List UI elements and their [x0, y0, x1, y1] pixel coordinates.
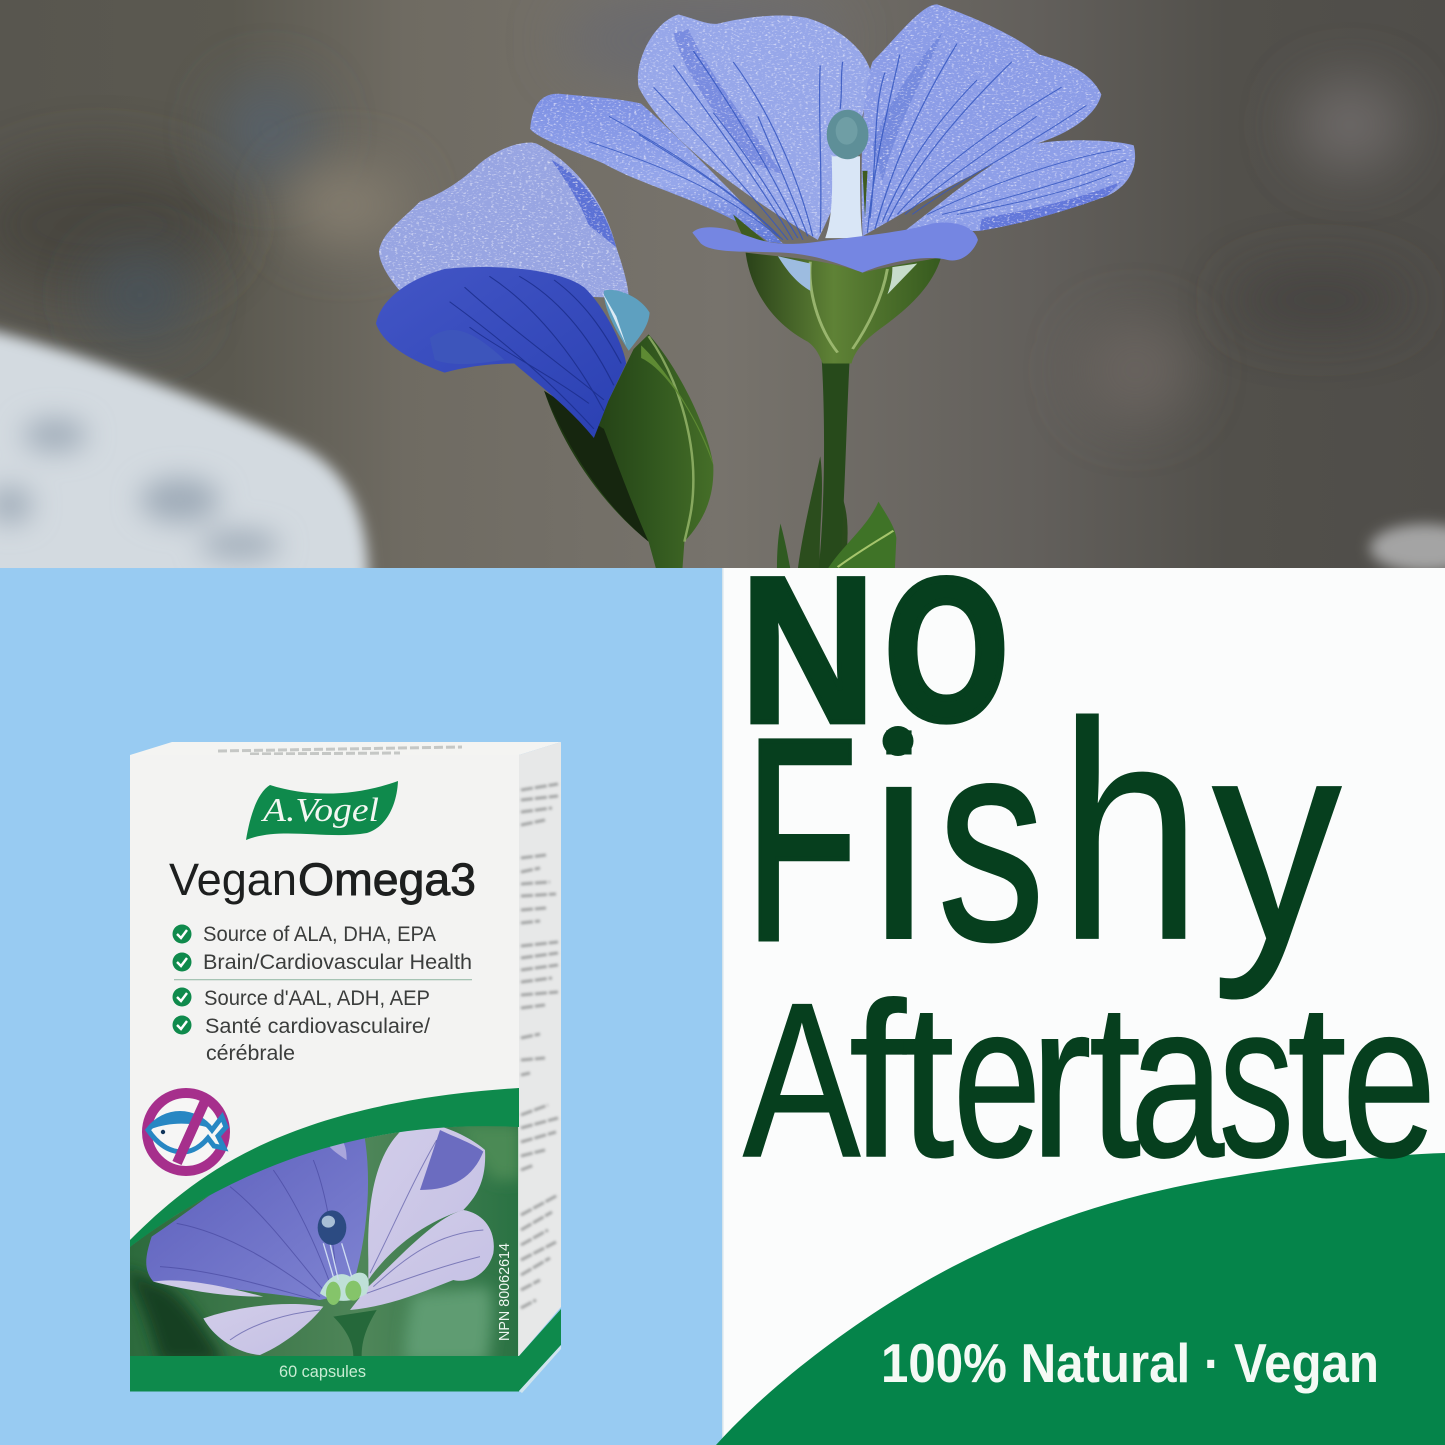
flower: open bloom and bud: [376, 4, 1135, 569]
logo: A.Vogel leaf: [246, 781, 398, 840]
bottom green band: [130, 1356, 519, 1392]
benefit list: Source of ALA, DHA, EPA: [203, 923, 436, 946]
bottom green band: 60 capsules: [279, 1363, 366, 1381]
icon: round dot on the i: [882, 726, 914, 756]
headline: Aftertaste: t: [900, 957, 954, 1203]
icon: no fish badge: [147, 1093, 226, 1171]
stamen: [825, 110, 868, 238]
headline: Aftertaste: f: [849, 957, 906, 1203]
product name: Omega3: [298, 854, 476, 905]
benefit list: Santé cardiovasculaire/: [205, 1015, 430, 1038]
check icon 3: [172, 988, 192, 1006]
benefit list: [172, 923, 472, 1065]
bud flower: [376, 143, 713, 569]
check icon 4: [172, 1016, 192, 1034]
headline: Aftertaste: e: [1342, 957, 1436, 1203]
headline: Aftertaste: e: [953, 957, 1041, 1203]
headline: NO: [740, 568, 1010, 730]
product name: [169, 854, 476, 905]
headline: Fishy: [745, 712, 1345, 1004]
headline: Fishy: h: [1058, 658, 1202, 1006]
headline: Aftertaste: [740, 985, 1435, 1160]
panel: blue background behind product: [0, 568, 722, 1445]
headline: Aftertaste: t: [1287, 957, 1347, 1203]
headline: Fishy: i: [867, 679, 931, 1001]
benefit list: Brain/Cardiovascular Health: [203, 951, 472, 974]
panel: white claim panel: [716, 568, 1445, 1445]
box right side panel: [519, 742, 561, 1393]
headline: NO: O: [885, 537, 1008, 762]
headline: Fishy: s: [938, 679, 1044, 1001]
green swoosh band: [130, 1088, 519, 1247]
check icon 1: [172, 924, 192, 944]
leaves and stem: [777, 360, 896, 569]
product box: VeganOmega3 carton: [120, 742, 561, 1393]
green corner swoosh: [716, 1153, 1445, 1445]
NPN number: NPN 80062614: [497, 1243, 513, 1341]
tagline: 100% Natural · Vegan: [881, 1332, 1379, 1394]
front petal lip: [692, 222, 978, 273]
benefit list: cérébrale: [206, 1042, 295, 1065]
panel: flax flower photograph: [0, 0, 1445, 600]
headline: Aftertaste: a: [1130, 957, 1224, 1203]
box top face: [130, 742, 561, 755]
headline: NO: N: [740, 533, 876, 766]
headline: Aftertaste: A: [743, 957, 860, 1203]
product name: Vegan: [169, 854, 297, 905]
calyx: [733, 171, 941, 364]
headline: Aftertaste: r: [1030, 957, 1092, 1203]
headline: Fishy: F: [745, 679, 858, 1001]
headline: Aftertaste: s: [1219, 957, 1294, 1203]
headline: Aftertaste: t: [1089, 957, 1141, 1203]
box flower photo: [130, 1126, 518, 1356]
logo: A.Vogel leaf: A.Vogel: [261, 792, 379, 829]
open flower petals: [530, 4, 1135, 244]
box front face: [130, 755, 519, 1391]
headline: Fishy: y: [1212, 679, 1342, 1001]
check icon 2: [172, 952, 192, 972]
benefit list: Source d'AAL, ADH, AEP: [204, 987, 430, 1010]
